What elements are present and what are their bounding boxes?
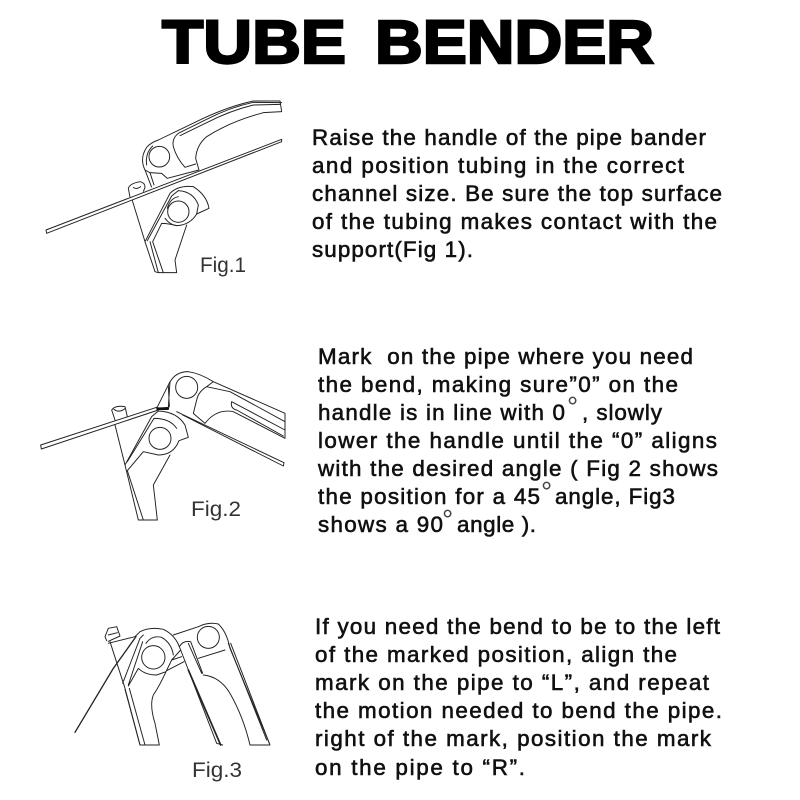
- instructions: step 3: mark on the pipe to “L”, and repeat: [315, 670, 710, 695]
- instructions: step 2: Mark on the pipe where you need: [318, 344, 693, 369]
- instructions: step 2: lower the handle until the “0” aligns: [318, 428, 717, 453]
- instructions: step 2: handle is in line with 0: [318, 400, 565, 425]
- instructions: step 2: °: [442, 504, 453, 535]
- instructions: step 3: of the marked position, align the: [315, 642, 677, 667]
- illustration: figure 2: [41, 372, 285, 520]
- instructions: step 2: shows a 90: [318, 512, 443, 537]
- illustration: figure 3: [75, 623, 270, 745]
- illustration: figure 1: [46, 101, 282, 273]
- instructions: step 2: °: [567, 391, 578, 422]
- instructions: step 1: Raise the handle of the pipe bander: [312, 125, 707, 150]
- instructions: step 2: [317, 344, 718, 537]
- instructions: step 2: the position for a 45: [318, 484, 540, 509]
- instructions: step 2: angle ).: [457, 512, 536, 537]
- instructions: step 2: angle, Fig3: [555, 484, 675, 509]
- instructions: step 1: and position tubing in the correct: [312, 153, 685, 178]
- instructions: step 2: the bend, making sure”0” on the: [318, 372, 678, 397]
- label: Fig.3: Fig.3: [192, 759, 242, 782]
- instructions: step 3: If you need the bend to be to the left: [315, 614, 721, 639]
- instructions: step 2: with the desired angle ( Fig 2 shows: [317, 456, 718, 481]
- instructions: step 1: [312, 125, 722, 262]
- instructions: step 3: the motion needed to bend the pipe.: [315, 698, 722, 723]
- instructions: step 3: [315, 614, 722, 780]
- pipe: [41, 407, 158, 449]
- instructions: step 2: °: [541, 476, 552, 507]
- instructions: step 1: channel size. Be sure the top surface: [312, 181, 722, 206]
- title: [162, 8, 654, 76]
- title: TUBE: [162, 8, 346, 76]
- instructions: step 1: of the tubing makes contact with the: [312, 209, 717, 234]
- instructions: step 3: on the pipe to “R”.: [315, 755, 525, 780]
- title: BENDER: [375, 8, 654, 76]
- label: Fig.1: Fig.1: [200, 254, 246, 277]
- instructions: step 3: right of the mark, position the mark: [315, 726, 712, 751]
- pipe: [46, 139, 282, 233]
- label: Fig.2: Fig.2: [191, 498, 241, 521]
- instructions: step 1: support(Fig 1).: [312, 237, 473, 262]
- instructions: step 2: , slowly: [582, 400, 663, 425]
